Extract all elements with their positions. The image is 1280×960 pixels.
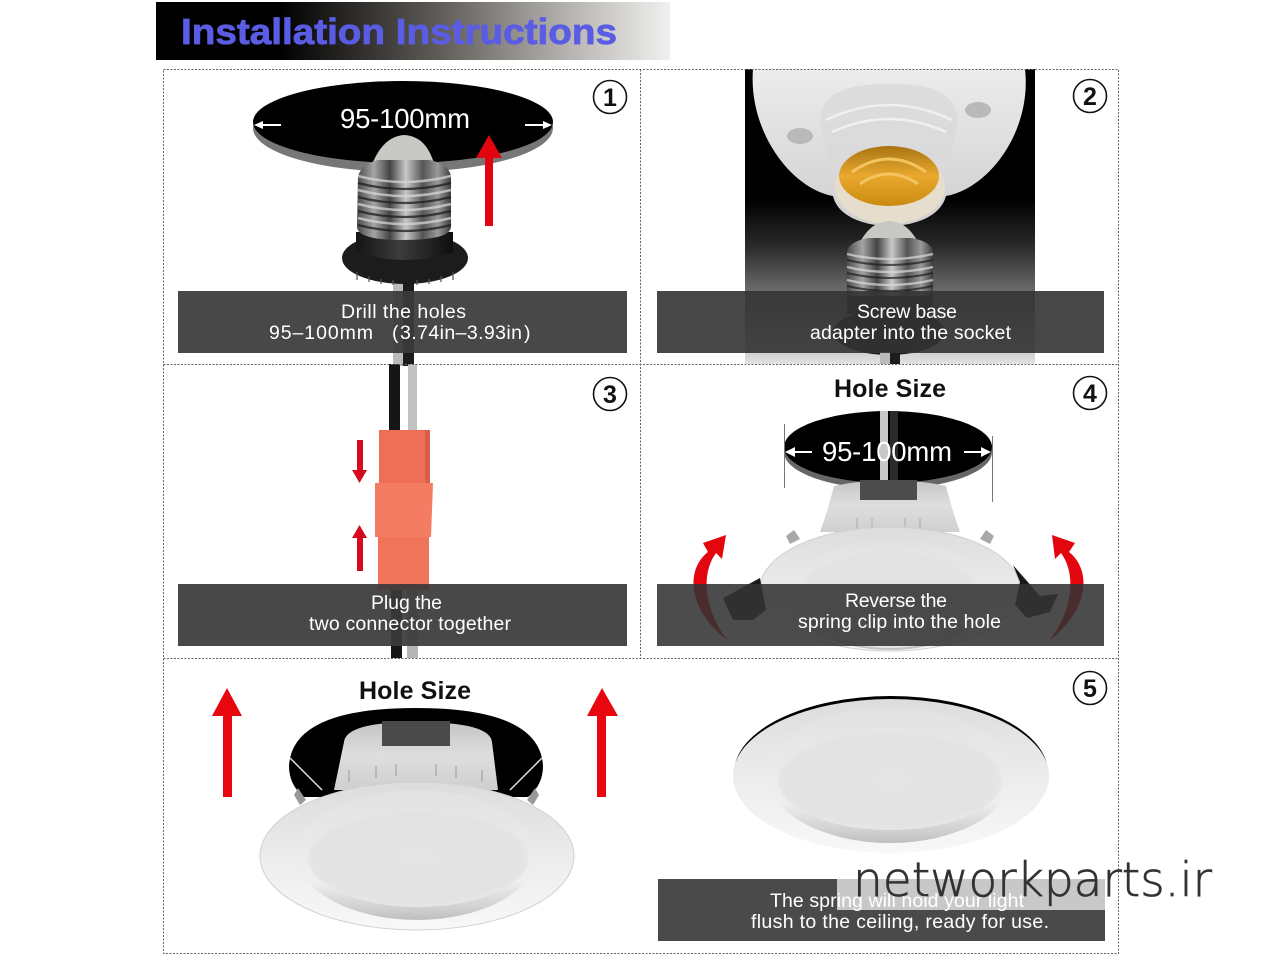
caption 2: Screw base <box>857 301 957 323</box>
number badge 3 <box>594 378 626 410</box>
caption 2 <box>657 291 1104 353</box>
caption 3: Plug the <box>371 592 442 614</box>
number badge 5: 5 <box>1083 675 1097 703</box>
orange connector <box>375 430 433 590</box>
number badge 4 <box>1074 376 1106 410</box>
caption 1: 3.74in–3.93in <box>400 322 522 344</box>
caption 4: Reverse the <box>845 590 947 612</box>
lamp <box>260 708 574 930</box>
caption 3 <box>178 584 627 646</box>
wires <box>389 364 418 658</box>
screw base adapter <box>833 221 945 364</box>
caption 5 <box>658 879 1105 941</box>
gradient backdrop <box>745 69 1035 364</box>
number badge 2: 2 <box>1083 83 1097 111</box>
red arrow left <box>212 688 242 797</box>
caption 1: ( <box>392 322 399 344</box>
panel 4: reverse spring clip <box>657 375 1106 651</box>
watermark: networkparts.ir <box>853 853 1213 908</box>
red up arrow <box>476 135 502 226</box>
title banner <box>156 2 670 60</box>
panel 1: drill the holes <box>178 80 627 366</box>
installed lamp <box>733 696 1049 853</box>
left width arrow <box>785 447 812 457</box>
caption 5: flush to the ceiling, ready for use. <box>751 911 1049 933</box>
panel 5 right: installed lamp <box>658 672 1106 941</box>
caption 1: Drill the holes <box>341 301 466 323</box>
panel 2: screw adapter into socket <box>657 69 1106 364</box>
caption 1: 95–100mm <box>269 322 373 344</box>
lamp <box>760 480 1020 651</box>
caption 5: The spring will hold your light <box>770 890 1025 912</box>
hole dimension label: 95-100mm <box>340 103 470 134</box>
red curved arrow left <box>694 535 727 640</box>
panel 3: plug the connectors <box>178 364 627 658</box>
red curved arrow right <box>1050 535 1083 640</box>
number badge 2 <box>1074 80 1106 112</box>
caption 1: ) <box>524 322 530 344</box>
red arrow right <box>587 688 618 797</box>
number badge 4: 4 <box>1083 380 1097 408</box>
caption 4 <box>657 584 1104 646</box>
caption 2: adapter into the socket <box>810 322 1012 344</box>
number badge 1: 1 <box>603 84 617 112</box>
number badge 5 <box>1074 672 1106 704</box>
right width arrow <box>525 121 552 129</box>
title banner: Installation Instructions <box>181 11 617 52</box>
caption 4: spring clip into the hole <box>798 611 1001 633</box>
lamp socket <box>753 69 1026 226</box>
wires <box>393 282 414 366</box>
spring clips <box>723 565 1058 620</box>
caption 3: two connector together <box>309 613 512 635</box>
panel 5 left: push lamp into hole <box>212 677 618 930</box>
hole size heading: Hole Size <box>359 677 471 705</box>
red arrow down <box>352 440 367 483</box>
left width arrow <box>254 121 281 129</box>
screw base adapter <box>342 135 468 285</box>
caption 1 <box>178 291 627 353</box>
hole dimension label: 95-100mm <box>822 436 952 467</box>
hole size heading: Hole Size <box>834 375 946 403</box>
panel grid <box>164 70 1118 954</box>
hole in ceiling <box>253 81 553 172</box>
red arrow up <box>352 525 367 571</box>
number badge 3: 3 <box>603 381 617 409</box>
number badge 1 <box>594 80 626 114</box>
right width arrow <box>964 447 991 457</box>
hole in ceiling <box>784 411 993 502</box>
